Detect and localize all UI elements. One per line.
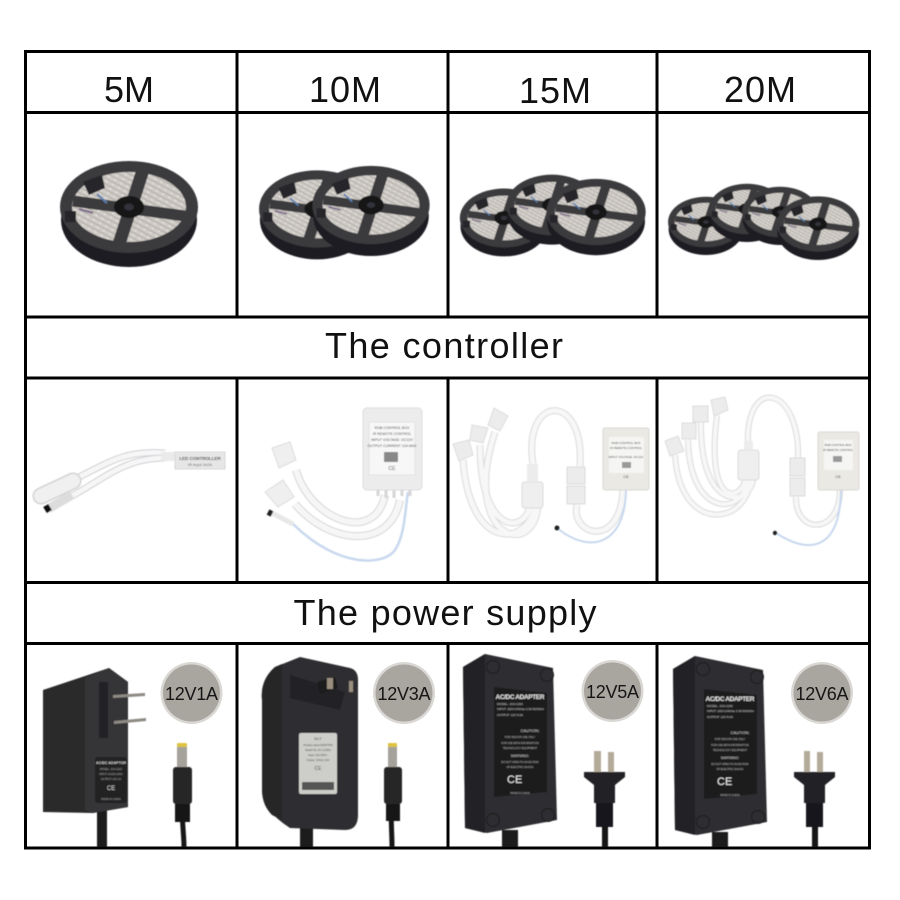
adapter: 12V1A wall wart [43, 668, 146, 847]
controller: dual output: RGB CONTROL BOX [375, 426, 410, 430]
badge: 12V5A [582, 660, 644, 722]
adapter: 12V5A brick: FOR USE WITH INFORMATION [501, 741, 539, 745]
controller: dual output: INPUT VOLTAGE: DC12V [371, 438, 413, 442]
controller: quad output [665, 397, 859, 545]
adapter: 12V5A brick: OUTPUT: 12V 5.0A [497, 713, 523, 717]
adapter: 12V6A brick: FOR USE WITH INFORMATION [711, 743, 749, 747]
adapter: 12V3A wall wart: Product name:ADAPTOR [303, 743, 333, 747]
heading: 15M: 15M [519, 70, 591, 111]
badge: 12V5A: 12V5A [586, 682, 639, 702]
adapter: 12V5A brick: FOR INDOOR USE ONLY [505, 735, 535, 739]
reel image: 20M [668, 184, 859, 260]
adapter: 12V5A brick: CAUTION: [520, 728, 540, 733]
adapter: 12V1A wall wart: MODEL: JCH-1201 [100, 767, 123, 771]
adapter: 12V6A brick: AC/DC ADAPTER [706, 696, 755, 703]
badge: 12V3A: 12V3A [378, 684, 430, 704]
adapter: 12V3A wall wart: CE [315, 766, 322, 772]
badge: 12V6A: 12V6A [796, 684, 848, 704]
adapter: 12V1A wall wart: INPUT: AC100-240V [99, 772, 123, 776]
heading: The controller: The controller [325, 325, 563, 366]
controller: triple output [453, 408, 649, 542]
badge: 12V3A [373, 662, 435, 724]
adapter: 12V6A brick: INPUT: 100V-240Vac 1.5A 50/60Hz [707, 709, 754, 713]
controller: triple output: INPUT VOLTAGE: DC12V [609, 455, 643, 459]
adapter: 12V6A brick: FOR INDOOR USE ONLY [715, 737, 745, 741]
adapter: 12V3A wall wart: KLY [314, 736, 322, 741]
badge: 12V1A [160, 662, 222, 724]
adapter: 12V1A wall wart: OUTPUT: 12V 1A [101, 777, 121, 781]
adapter: 12V5A brick: MADE IN CHINA [510, 791, 530, 795]
controller: mini inline: LED CONTROLLER [179, 456, 221, 461]
badge: 12V1A: 12V1A [165, 684, 218, 704]
heading: 10M: 10M [309, 69, 381, 110]
heading: 20M: 20M [724, 69, 796, 110]
controller: dual output: CE [389, 466, 396, 472]
adapter: 12V1A wall wart: AC/DC ADAPTOR [96, 761, 126, 765]
adapter: 12V1A wall wart: MADE IN CHINA [101, 797, 121, 801]
controller: quad output: RGB CONTROL BOX [824, 443, 852, 447]
adapter: 12V5A brick: MODEL: JCH-1260 [497, 702, 523, 706]
adapter: 12V6A brick: MODEL: JCH-1260 [707, 704, 733, 708]
reel image: 5M [60, 161, 198, 267]
controller: quad output: IR REMOTE CONTROL [823, 448, 853, 452]
reel image: 10M [259, 166, 430, 259]
icon: mains plug [584, 751, 625, 847]
badge: 12V6A [791, 662, 853, 724]
reel image: 15M [460, 175, 646, 256]
adapter: 12V6A brick: OUTPUT: 12V 5.0A [707, 715, 733, 719]
adapter: 12V6A brick: WARNING: [721, 756, 739, 760]
heading: 5M: 5M [104, 69, 154, 110]
adapter: 12V5A brick: CE [507, 774, 522, 786]
adapter: 12V5A brick: DO NOT OPEN TO AVOID RISK [501, 760, 539, 764]
adapter: 12V3A wall wart: Output: 12Vdc 3.0A [307, 758, 330, 762]
adapter: 12V5A brick: OF ELECTRIC SHOCK [506, 765, 534, 769]
controller: quad output: CE [835, 474, 841, 479]
adapter: 12V5A brick: WARNING: [511, 754, 529, 758]
adapter: 12V6A brick: TECHNOLOGY EQUIPMENT [713, 748, 748, 752]
controller: dual output [265, 408, 422, 561]
controller: triple output: CE [623, 474, 629, 479]
adapter: 12V6A brick: CAUTION: [730, 730, 750, 735]
adapter: 12V5A brick: TECHNOLOGY EQUIPMENT [503, 746, 538, 750]
icon: DC plug [173, 743, 192, 847]
panel: power supplies [43, 654, 853, 847]
adapter: 12V3A wall wart [262, 657, 358, 847]
adapter: 12V5A brick: INPUT: 100V-240Vac 1.5A 50/60Hz [497, 707, 544, 711]
row 1: length headings [104, 69, 796, 111]
adapter: 12V6A brick: DO NOT OPEN TO AVOID RISK [711, 762, 749, 766]
controller: mini inline: IR input 3x2A [188, 462, 212, 467]
adapter: 12V3A wall wart: Input: 110-240V~ [308, 753, 328, 757]
controller: triple output: IR REMOTE CONTROL [610, 446, 642, 450]
heading: The power supply: The power supply [294, 592, 596, 633]
adapter: 12V6A brick: MADE IN CHINA [720, 793, 740, 797]
adapter: 12V5A brick [463, 654, 557, 847]
controller: triple output: RGB CONTROL BOX [611, 441, 641, 445]
controller: mini inline [41, 452, 225, 510]
controller: dual output: IR REMOTE CONTROL [373, 432, 411, 436]
adapter: 12V6A brick: CE [717, 776, 732, 788]
panel: LED reels [60, 161, 859, 267]
panel: controllers [41, 397, 859, 561]
icon: DC plug [384, 743, 402, 847]
controller: dual output: OUTPUT CURRENT 12A MAX [367, 444, 417, 448]
adapter: 12V3A wall wart: Model No: KLY-1230A [305, 748, 331, 752]
adapter: 12V1A wall wart: CE [107, 786, 115, 792]
adapter: 12V5A brick: AC/DC ADAPTER [496, 694, 545, 701]
icon: mains plug [794, 751, 835, 847]
adapter: 12V6A brick: OF ELECTRIC SHOCK [716, 767, 744, 771]
adapter: 12V6A brick [673, 656, 767, 847]
